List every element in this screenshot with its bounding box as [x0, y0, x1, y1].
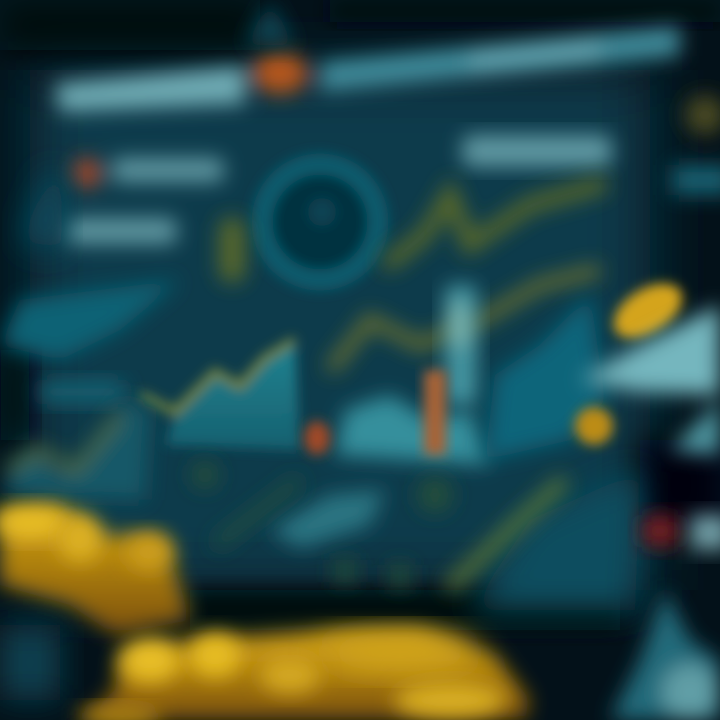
upper left teal area — [0, 280, 180, 360]
lower center light block — [270, 490, 385, 548]
olive diagonal line lower right — [448, 480, 565, 588]
center olive line — [330, 270, 600, 370]
red marker — [304, 421, 330, 455]
left teal side block — [20, 170, 65, 250]
right area chart — [485, 295, 605, 460]
faint label left — [40, 380, 125, 404]
red marker right — [642, 515, 678, 547]
right edge items — [672, 95, 720, 195]
right heading text — [462, 135, 612, 167]
orange bar — [424, 370, 446, 455]
olive line on chart — [140, 340, 295, 412]
gold round coin — [575, 407, 613, 445]
olive diagonal line lower centre — [215, 480, 300, 545]
title banner — [55, 26, 680, 112]
center area chart — [335, 395, 490, 465]
small dark olive marks — [192, 462, 452, 587]
olive trend line upper — [232, 185, 600, 270]
donut ring chart — [262, 164, 378, 280]
top peak — [245, 0, 295, 45]
light teal cloud shape — [580, 305, 720, 455]
bottom left small spikes chart — [0, 400, 150, 500]
title accent — [252, 52, 308, 94]
area chart left — [140, 340, 300, 450]
pale right block — [690, 515, 720, 550]
bottom left teal patch — [0, 625, 60, 700]
gold pile left — [0, 505, 190, 635]
legend marker — [72, 158, 102, 188]
lower right teal panel — [470, 470, 640, 610]
light vertical bar — [445, 285, 477, 405]
gold oval coin — [604, 272, 692, 350]
gold pile bottom — [78, 630, 530, 720]
bottom right teal shape — [610, 590, 720, 720]
left legend items — [65, 158, 224, 244]
